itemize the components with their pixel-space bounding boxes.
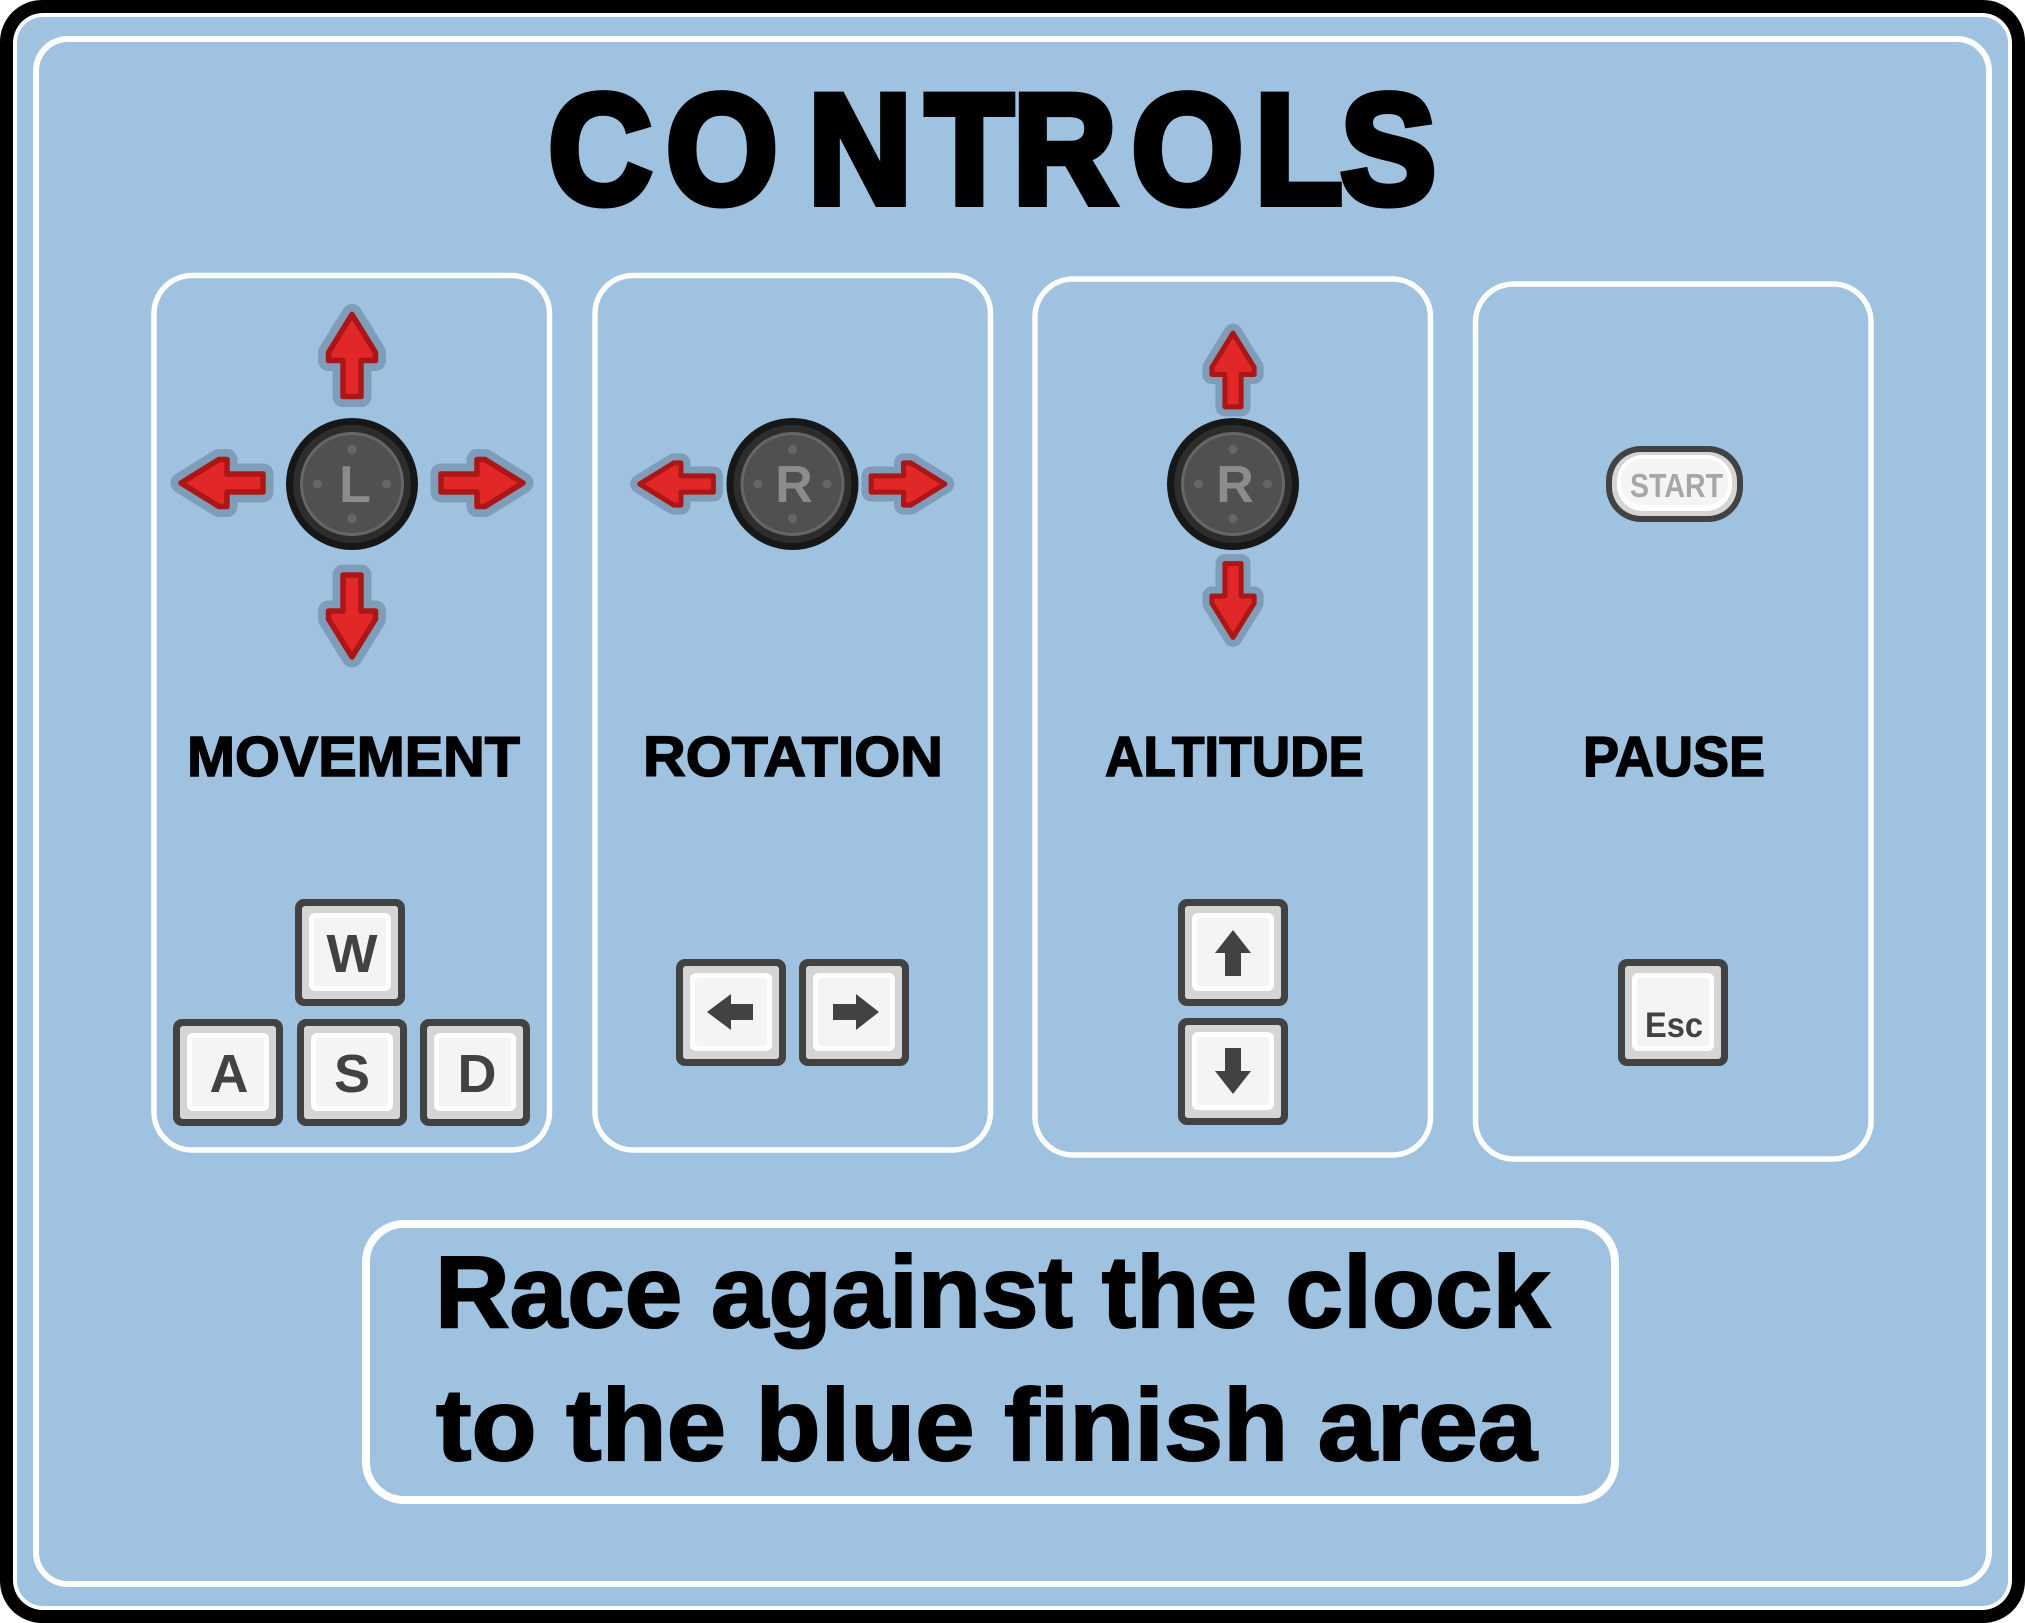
arrow: up — [328, 314, 376, 396]
callout line 2: to the blue finish area — [436, 1368, 1538, 1482]
heading: altitude: ALTITUDE — [1105, 725, 1364, 789]
key: W: W — [327, 924, 378, 984]
joystick: R: R — [775, 456, 813, 514]
key: S: S — [334, 1044, 370, 1104]
key: W — [295, 899, 405, 1006]
arrow: up — [1212, 333, 1254, 407]
arrow: down — [1212, 564, 1254, 637]
arrow: right — [871, 463, 945, 505]
key: D — [420, 1019, 530, 1126]
joystick: L — [286, 418, 418, 550]
key: Esc: Esc — [1645, 1006, 1703, 1045]
heading: rotation: ROTATION — [643, 725, 943, 789]
key: S — [297, 1019, 407, 1126]
key: D: D — [458, 1044, 496, 1104]
panel: movement — [154, 276, 550, 1150]
key: Esc — [1618, 959, 1728, 1066]
joystick: R: R — [1216, 456, 1254, 514]
heading: movement: MOVEMENT — [187, 725, 520, 789]
key: left arrow — [676, 959, 786, 1066]
arrow: right — [441, 460, 523, 506]
panel: altitude — [1035, 279, 1430, 1155]
key: right arrow — [799, 959, 909, 1066]
joystick: R — [1167, 418, 1299, 550]
heading: pause: PAUSE — [1583, 725, 1765, 789]
title: CONTROLS — [548, 61, 1436, 236]
button: start — [1606, 446, 1743, 522]
joystick: L: L — [339, 456, 371, 514]
button: start: START — [1630, 467, 1723, 504]
key: A — [173, 1019, 283, 1126]
arrow: down — [328, 575, 376, 657]
joystick: R — [726, 418, 858, 550]
key: down arrow — [1178, 1018, 1288, 1125]
arrow: left — [640, 463, 713, 505]
key: A: A — [210, 1044, 248, 1104]
callout line 1: Race against the clock — [435, 1235, 1550, 1349]
panel: rotation — [595, 276, 990, 1150]
arrow: left — [181, 460, 263, 506]
key: up arrow — [1178, 899, 1288, 1006]
callout: objective — [366, 1224, 1615, 1500]
panel: pause — [1476, 284, 1871, 1159]
